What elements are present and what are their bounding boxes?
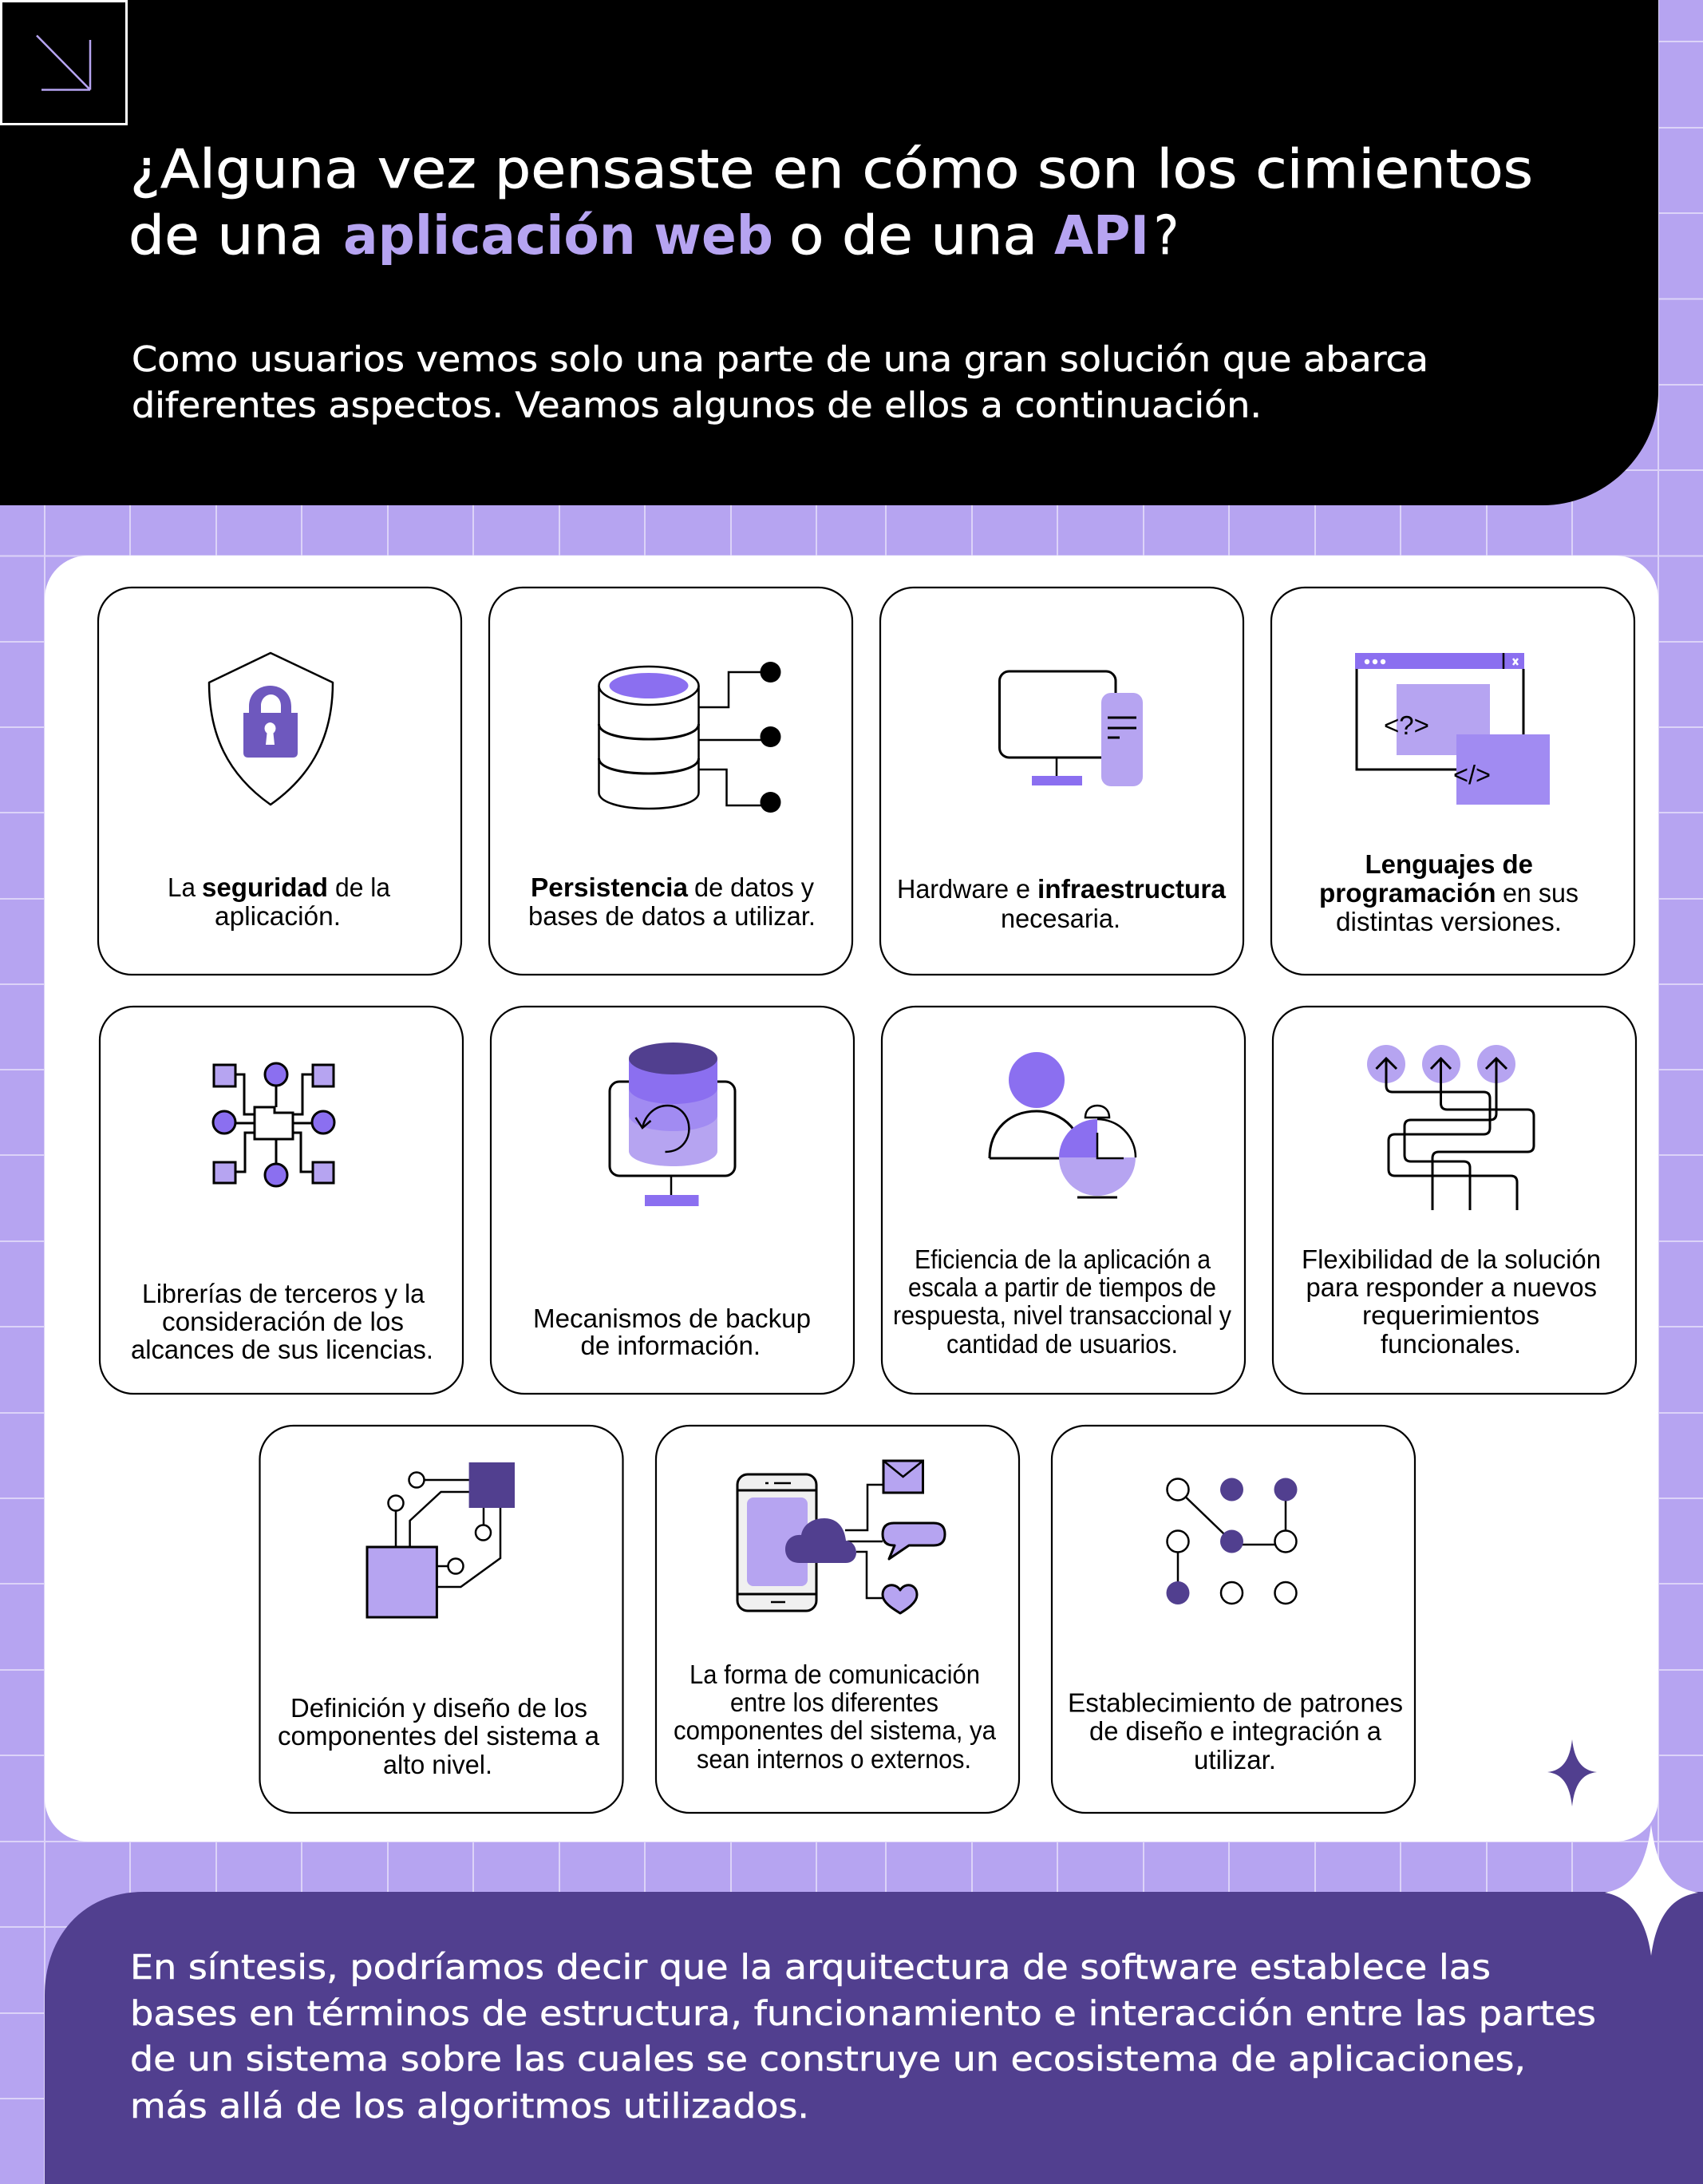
icon: backup database on monitor	[610, 1043, 735, 1206]
text: La forma de comunicación	[689, 1660, 980, 1689]
icon: arrow box	[2, 2, 126, 125]
text: infraestructura	[1037, 874, 1227, 904]
text: alcances de sus licencias.	[131, 1335, 433, 1364]
text: sean internos o externos.	[697, 1744, 971, 1774]
title: ?	[1154, 204, 1179, 267]
text: Eficiencia de la aplicación a	[915, 1244, 1211, 1274]
title: API	[1054, 204, 1149, 267]
card: eficiencia	[882, 1007, 1245, 1394]
icon: shield with lock	[209, 653, 333, 805]
footer text: de un sistema sobre las cuales se construye un ecosistema de aplicaciones,	[130, 2040, 1526, 2079]
text	[897, 874, 1227, 933]
title: ¿Alguna vez pensaste en cómo son los cimientos	[130, 138, 1533, 200]
text	[1068, 1687, 1403, 1774]
icon: database	[599, 662, 780, 813]
text: entre los diferentes	[730, 1687, 938, 1717]
header panel	[0, 0, 1658, 505]
text	[533, 1304, 811, 1360]
text	[1319, 849, 1579, 936]
text: para responder a nuevos	[1306, 1272, 1597, 1302]
text: de datos y	[694, 872, 814, 902]
text: Hardware e	[897, 874, 1030, 904]
icon: code windows: </>	[1453, 760, 1491, 789]
text: escala a partir de tiempos de	[908, 1272, 1216, 1302]
subtitle: Como usuarios vemos solo una parte de una gran solución que abarca	[132, 339, 1428, 380]
text: necesaria.	[1001, 904, 1120, 933]
title	[128, 138, 1533, 267]
text: Definición y diseño de los	[290, 1693, 587, 1723]
footer text: bases en términos de estructura, funcionamiento e interacción entre las partes	[130, 1994, 1596, 2034]
text: programación	[1319, 878, 1496, 908]
subtitle	[132, 339, 1428, 426]
text	[528, 872, 816, 931]
text: distintas versiones.	[1336, 907, 1562, 936]
text: bases de datos a utilizar.	[528, 901, 816, 931]
text: utilizar.	[1194, 1745, 1276, 1774]
footer text	[130, 1948, 1596, 2127]
text: en sus	[1503, 878, 1579, 908]
text: de diseño e integración a	[1089, 1716, 1382, 1746]
icon: flexible paths with arrows	[1367, 1045, 1534, 1210]
icon: phone, cloud and messages	[737, 1461, 945, 1613]
text: respuesta, nivel transaccional y	[893, 1300, 1231, 1330]
title: o de una	[789, 204, 1037, 267]
text: funcionales.	[1381, 1329, 1521, 1359]
text: alto nivel.	[383, 1750, 492, 1779]
card: patrones	[1052, 1426, 1415, 1813]
icon: large white sparkle	[1605, 1825, 1698, 1956]
text	[131, 1279, 433, 1364]
text: seguridad	[202, 872, 328, 902]
icon: person and clock	[990, 1052, 1136, 1197]
text: La	[168, 872, 196, 902]
icon: code windows	[1355, 653, 1550, 805]
text: Lenguajes de	[1365, 849, 1533, 879]
footer text: En síntesis, podríamos decir que la arquitectura de software establece las	[130, 1948, 1491, 1988]
card: definición	[260, 1426, 622, 1813]
card: seguridad	[98, 588, 461, 975]
text	[278, 1693, 600, 1779]
text: cantidad de usuarios.	[946, 1329, 1178, 1359]
text	[674, 1660, 997, 1774]
text: componentes del sistema, ya	[674, 1715, 997, 1745]
text: Librerías de terceros y la	[142, 1279, 425, 1308]
text: Persistencia	[531, 872, 689, 902]
footer text: más allá de los algoritmos utilizados.	[130, 2087, 809, 2127]
panel: footer summary	[45, 1892, 1703, 2184]
text	[893, 1244, 1231, 1359]
text: de información.	[581, 1331, 761, 1360]
icon: pattern dots	[1167, 1478, 1298, 1604]
card: librerías	[100, 1007, 463, 1394]
text	[1302, 1244, 1601, 1359]
text	[168, 872, 391, 931]
text: Flexibilidad de la solución	[1302, 1244, 1601, 1274]
text: requerimientos	[1362, 1300, 1539, 1330]
text: componentes del sistema a	[278, 1721, 600, 1751]
text: Mecanismos de backup	[533, 1304, 811, 1333]
icon: network nodes	[213, 1063, 334, 1186]
icon: small sparkle	[1547, 1739, 1597, 1806]
text: Establecimiento de patrones	[1068, 1687, 1403, 1718]
subtitle: diferentes aspectos. Veamos algunos de ellos a continuación.	[132, 385, 1262, 426]
text: aplicación.	[215, 901, 341, 931]
card: flexibilidad	[1273, 1007, 1636, 1394]
text: de la	[335, 872, 391, 902]
card: persistencia	[489, 588, 852, 975]
text: consideración de los	[162, 1307, 404, 1336]
title: aplicación web	[343, 204, 773, 267]
icon: system components	[367, 1462, 515, 1617]
card: lenguajes	[1271, 588, 1634, 975]
icon: computer	[999, 671, 1143, 786]
card: comunicación	[656, 1426, 1019, 1813]
panel: white card area	[45, 556, 1658, 1842]
card: infraestructura	[880, 588, 1243, 975]
card: backup	[491, 1007, 854, 1394]
title: de una	[128, 204, 324, 267]
icon: code windows: <?>	[1384, 710, 1429, 740]
